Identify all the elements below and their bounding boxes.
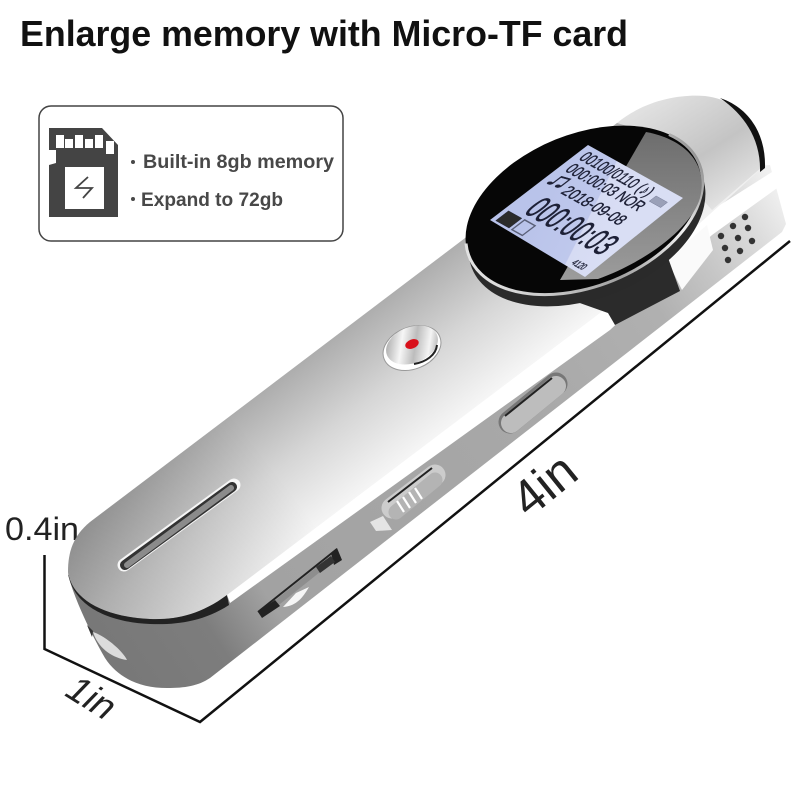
lcd icons (496, 211, 535, 235)
panel: memory info (39, 106, 343, 241)
record slit (124, 485, 234, 565)
speaker grille (718, 214, 755, 263)
icon: memory card (49, 128, 118, 217)
dark rim (68, 572, 229, 624)
lcd battery (649, 196, 668, 208)
label: height: 0.4in (5, 511, 79, 547)
face end shading (68, 120, 765, 619)
lcd status lines (490, 147, 678, 272)
lcd timer: 000:00:03 (516, 191, 629, 261)
device top face (68, 120, 765, 619)
slide switch (370, 468, 435, 531)
silver ring (466, 134, 703, 295)
side button (505, 378, 556, 423)
device cap (617, 96, 762, 210)
lcd screen (490, 145, 683, 277)
memory card slot (258, 548, 342, 618)
record button (376, 317, 448, 379)
text: built-in memory: Built-in 8gb memory (143, 152, 334, 173)
white edge highlight (227, 172, 780, 603)
label: width: 1in (56, 669, 128, 726)
title: Enlarge memory with Micro-TF card (20, 13, 628, 54)
display stand (444, 105, 730, 339)
usb port (87, 625, 127, 660)
lcd status lines: 000:00:03 NOR (561, 160, 651, 214)
text: expand memory: Expand to 72gb (141, 190, 283, 211)
label: length: 4in (501, 442, 588, 528)
dimension lines (44, 241, 790, 722)
lcd status lines: 00100/0110 (♪) (575, 149, 660, 200)
lcd status lines: 4120 (568, 259, 589, 272)
lcd status lines: 2018-09-08 (557, 183, 632, 228)
display (441, 93, 727, 327)
lcd status lines: ♫ (539, 165, 582, 195)
cap rim (720, 98, 765, 172)
device side (68, 165, 786, 688)
screen reflection (560, 132, 702, 280)
voice recorder device (68, 93, 786, 688)
